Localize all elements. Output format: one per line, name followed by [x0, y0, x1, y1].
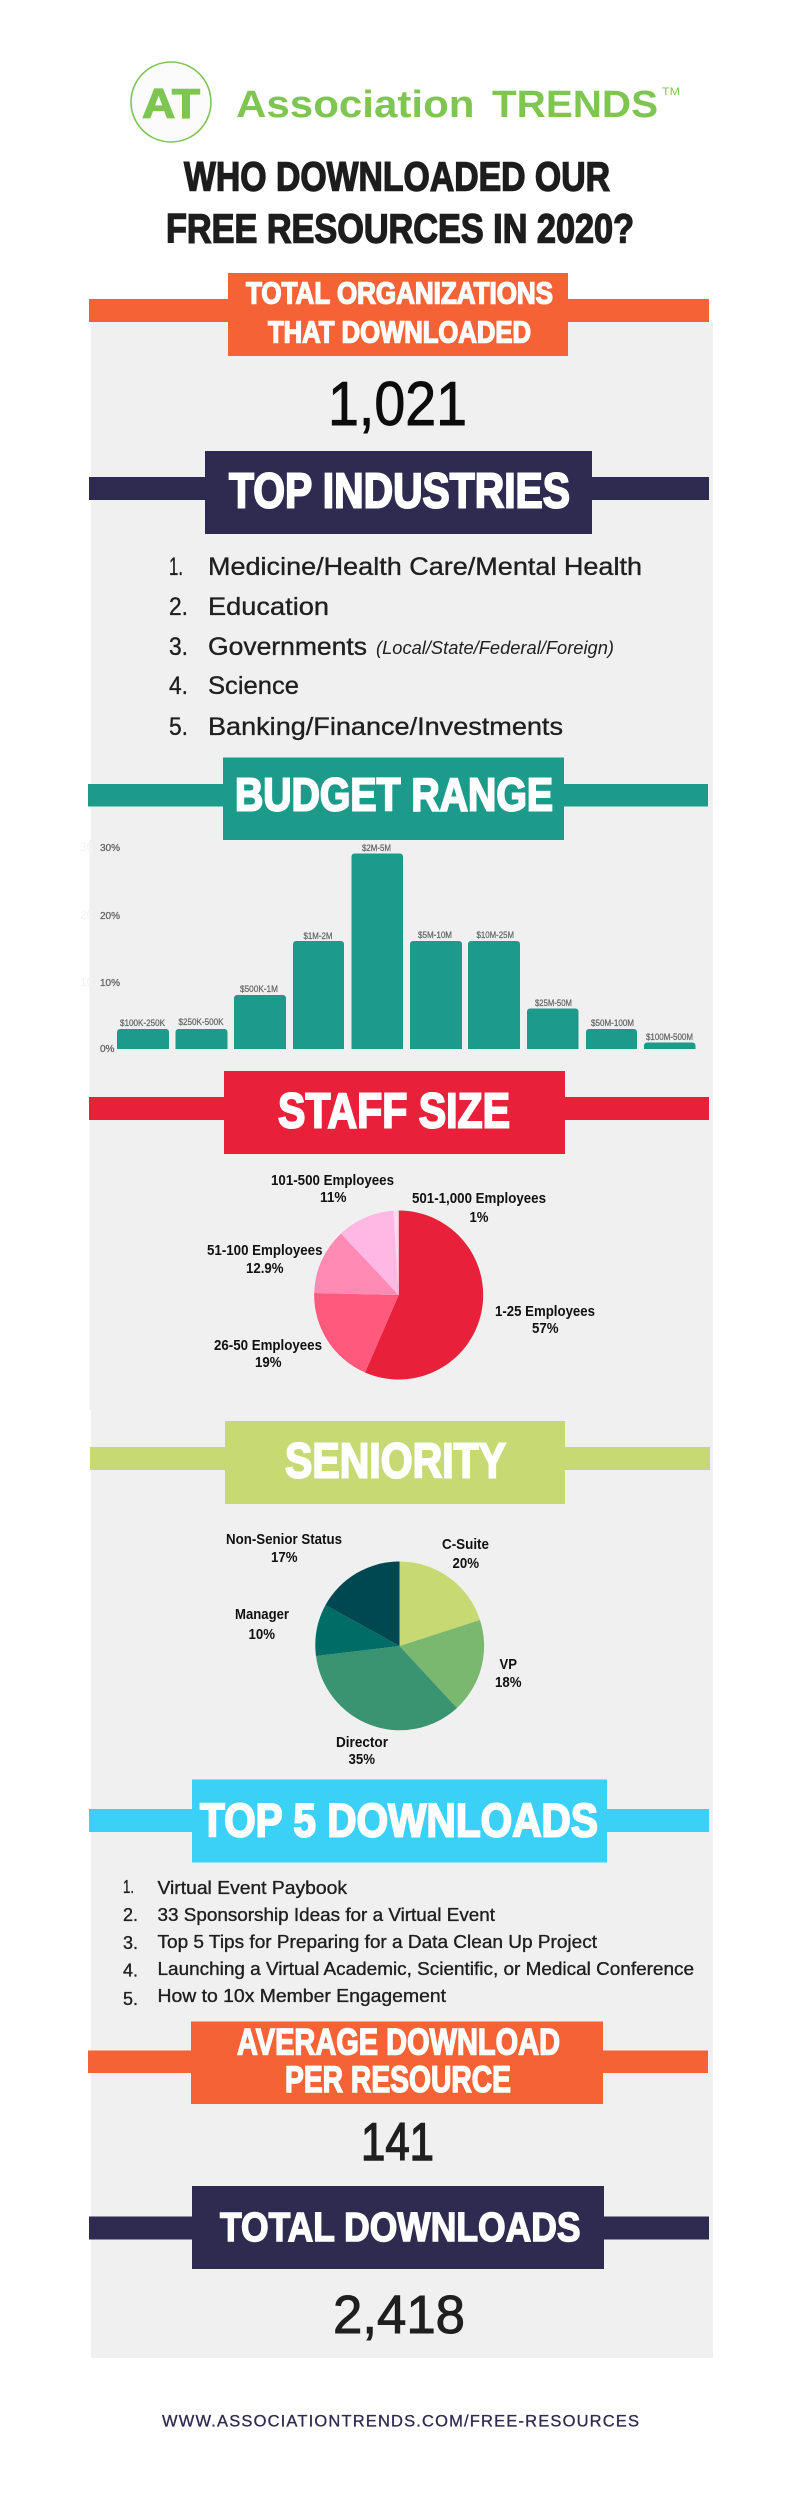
axis labels: 20%: [100, 911, 120, 922]
list: top industries: Science: [208, 672, 299, 700]
list: top industries: 3.: [169, 633, 188, 661]
pie chart: seniority: [226, 1531, 522, 1768]
label: 51-100 employees: [207, 1242, 322, 1277]
bar: $2M-5M: [352, 843, 403, 1049]
list: top industries: Banking/Finance/Investments: [208, 713, 563, 741]
label: 501-1,000 employees: [412, 1190, 546, 1226]
banner: top industries: TOP INDUSTRIES: [229, 464, 570, 518]
banner: total organizations: [89, 273, 709, 356]
label: 1-25 employees: [495, 1303, 595, 1337]
label: non-senior status: [226, 1531, 342, 1566]
label: 51-100 employees: 12.9%: [246, 1260, 284, 1277]
list: top industries: Education: [208, 593, 329, 621]
list: top 5 downloads: 1.: [123, 1877, 134, 1897]
bar: $500K-1M: [234, 984, 286, 1049]
label: 1-25 employees: 1-25 Employees: [495, 1303, 595, 1320]
bar: $100M-500M: [644, 1032, 696, 1049]
label: 501-1,000 employees: 501-1,000 Employees: [412, 1190, 546, 1207]
axis labels: 0%: [100, 1044, 115, 1055]
axis labels: 10%: [100, 978, 120, 989]
banner: top 5 downloads: TOP 5 DOWNLOADS: [200, 1794, 598, 1846]
label: 101-500 employees: 101-500 Employees: [271, 1172, 394, 1189]
banner: seniority: [90, 1421, 710, 1504]
banner: budget range: [88, 758, 708, 840]
title: FREE RESOURCES IN 2020?: [166, 206, 634, 252]
list: top industries: (Local/State/Federal/Foreign): [376, 638, 614, 658]
label: manager: [235, 1606, 289, 1643]
pie chart: staff size: [207, 1172, 595, 1380]
bar: $25M-50M: $25M-50M: [535, 998, 572, 1009]
label: 26-50 employees: [214, 1337, 322, 1371]
label: director: [336, 1734, 388, 1768]
label: director: 35%: [348, 1751, 375, 1768]
background panel: [90, 322, 713, 2358]
label: 26-50 employees: 26-50 Employees: [214, 1337, 322, 1354]
axis labels: [80, 840, 120, 1055]
label: director: Director: [336, 1734, 388, 1751]
banner: top industries: [89, 451, 709, 534]
bar: $500K-1M: $500K-1M: [240, 984, 278, 995]
bar: $10M-25M: $10M-25M: [476, 930, 514, 941]
list: top industries: 4.: [169, 672, 188, 700]
axis labels: 20: [80, 908, 94, 922]
label: vp: VP: [500, 1656, 517, 1673]
bar: $100K-250K: $100K-250K: [120, 1018, 166, 1029]
bar: $100K-250K: [117, 1018, 169, 1049]
label: c-suite: 20%: [452, 1555, 479, 1572]
stat: 1,021 organizations: 1,021: [328, 370, 467, 439]
list: top 5 downloads: Top 5 Tips for Preparing for a Data Clean Up Project: [158, 1932, 597, 1952]
bar: $5M-10M: $5M-10M: [418, 930, 452, 941]
list: top industries: 2.: [169, 593, 188, 621]
label: c-suite: [442, 1536, 489, 1572]
list: top industries: Medicine/Health Care/Mental Health: [208, 553, 642, 581]
list: top industries: [169, 553, 642, 741]
label: vp: 18%: [495, 1674, 522, 1691]
banner: staff size: STAFF SIZE: [278, 1084, 510, 1138]
title: [166, 154, 634, 252]
stat: 141 average downloads: 141: [361, 2113, 434, 2172]
bar: $1M-2M: $1M-2M: [304, 931, 333, 942]
list: top 5 downloads: How to 10x Member Engagement: [158, 1986, 446, 2006]
stat: 2,418 total downloads: 2,418: [333, 2285, 465, 2345]
label: vp: [495, 1656, 522, 1691]
bar chart: budget range: [80, 840, 696, 1055]
label: non-senior status: 17%: [271, 1549, 298, 1566]
label: 1-25 employees: 57%: [532, 1320, 558, 1337]
banner: total downloads: TOTAL DOWNLOADS: [220, 2204, 580, 2250]
footer url: WWW.ASSOCIATIONTRENDS.COM/FREE-RESOURCES: [162, 2412, 639, 2430]
bar: $100M-500M: $100M-500M: [646, 1032, 693, 1043]
icon: AT circle: AT: [142, 80, 200, 127]
label: 26-50 employees: 19%: [255, 1354, 282, 1371]
label: c-suite: C-Suite: [442, 1536, 489, 1553]
banner: seniority: SENIORITY: [285, 1434, 506, 1488]
bar: $50M-100M: $50M-100M: [591, 1018, 634, 1029]
label: 51-100 employees: 51-100 Employees: [207, 1242, 322, 1259]
banner: total downloads: [89, 2186, 709, 2269]
list: top 5 downloads: Virtual Event Paybook: [158, 1878, 348, 1898]
icon: AT circle: [131, 62, 211, 142]
label: 101-500 employees: [271, 1172, 394, 1206]
list: top industries: Governments: [208, 633, 367, 661]
logo wordmark: Association: [236, 84, 474, 126]
label: non-senior status: Non-Senior Status: [226, 1531, 342, 1548]
list: top 5 downloads: [123, 1877, 694, 2009]
axis labels: 10: [80, 975, 94, 989]
list: top 5 downloads: 5.: [123, 1989, 138, 2009]
axis labels: 30%: [100, 843, 120, 854]
banner: top 5 downloads: [89, 1780, 709, 1862]
logo wordmark: [236, 84, 680, 126]
bar: $25M-50M: [527, 998, 578, 1049]
bar: $2M-5M: $2M-5M: [362, 843, 391, 854]
banner: average download per resource: PER RESOURCE: [285, 2059, 511, 2100]
banner: staff size: [89, 1071, 709, 1154]
bar: $5M-10M: [410, 930, 462, 1049]
label: manager: Manager: [235, 1606, 289, 1623]
bar: $1M-2M: [293, 931, 344, 1049]
bar: $50M-100M: [586, 1018, 637, 1049]
label: 501-1,000 employees: 1%: [470, 1209, 488, 1226]
banner: budget range: BUDGET RANGE: [235, 768, 553, 820]
banner: total organizations: TOTAL ORGANIZATIONS: [246, 276, 553, 310]
axis labels: 30: [80, 840, 94, 854]
list: top 5 downloads: 2.: [123, 1905, 138, 1925]
bar: $250K-500K: $250K-500K: [178, 1017, 224, 1028]
list: top industries: 1.: [169, 553, 183, 581]
bar: $10M-25M: [468, 930, 520, 1049]
banner: average download per resource: [88, 2022, 708, 2104]
banner: total organizations: THAT DOWNLOADED: [268, 314, 531, 350]
list: top 5 downloads: 3.: [123, 1933, 138, 1953]
list: top 5 downloads: 4.: [123, 1960, 138, 1980]
list: top 5 downloads: Launching a Virtual Academic, Scientific, or Medical Conference: [158, 1959, 694, 1979]
title: WHO DOWNLOADED OUR: [184, 154, 610, 200]
label: manager: 10%: [248, 1626, 275, 1643]
logo wordmark: TRENDS: [492, 84, 658, 126]
logo: Association Trends: [131, 62, 680, 142]
list: top industries: 5.: [169, 713, 188, 741]
list: top 5 downloads: 33 Sponsorship Ideas for a Virtual Event: [158, 1905, 495, 1925]
logo wordmark: TM: [662, 86, 680, 98]
label: 101-500 employees: 11%: [320, 1189, 346, 1206]
banner: average download per resource: AVERAGE DOWNLOAD: [237, 2022, 560, 2062]
bar: $250K-500K: [176, 1017, 228, 1049]
